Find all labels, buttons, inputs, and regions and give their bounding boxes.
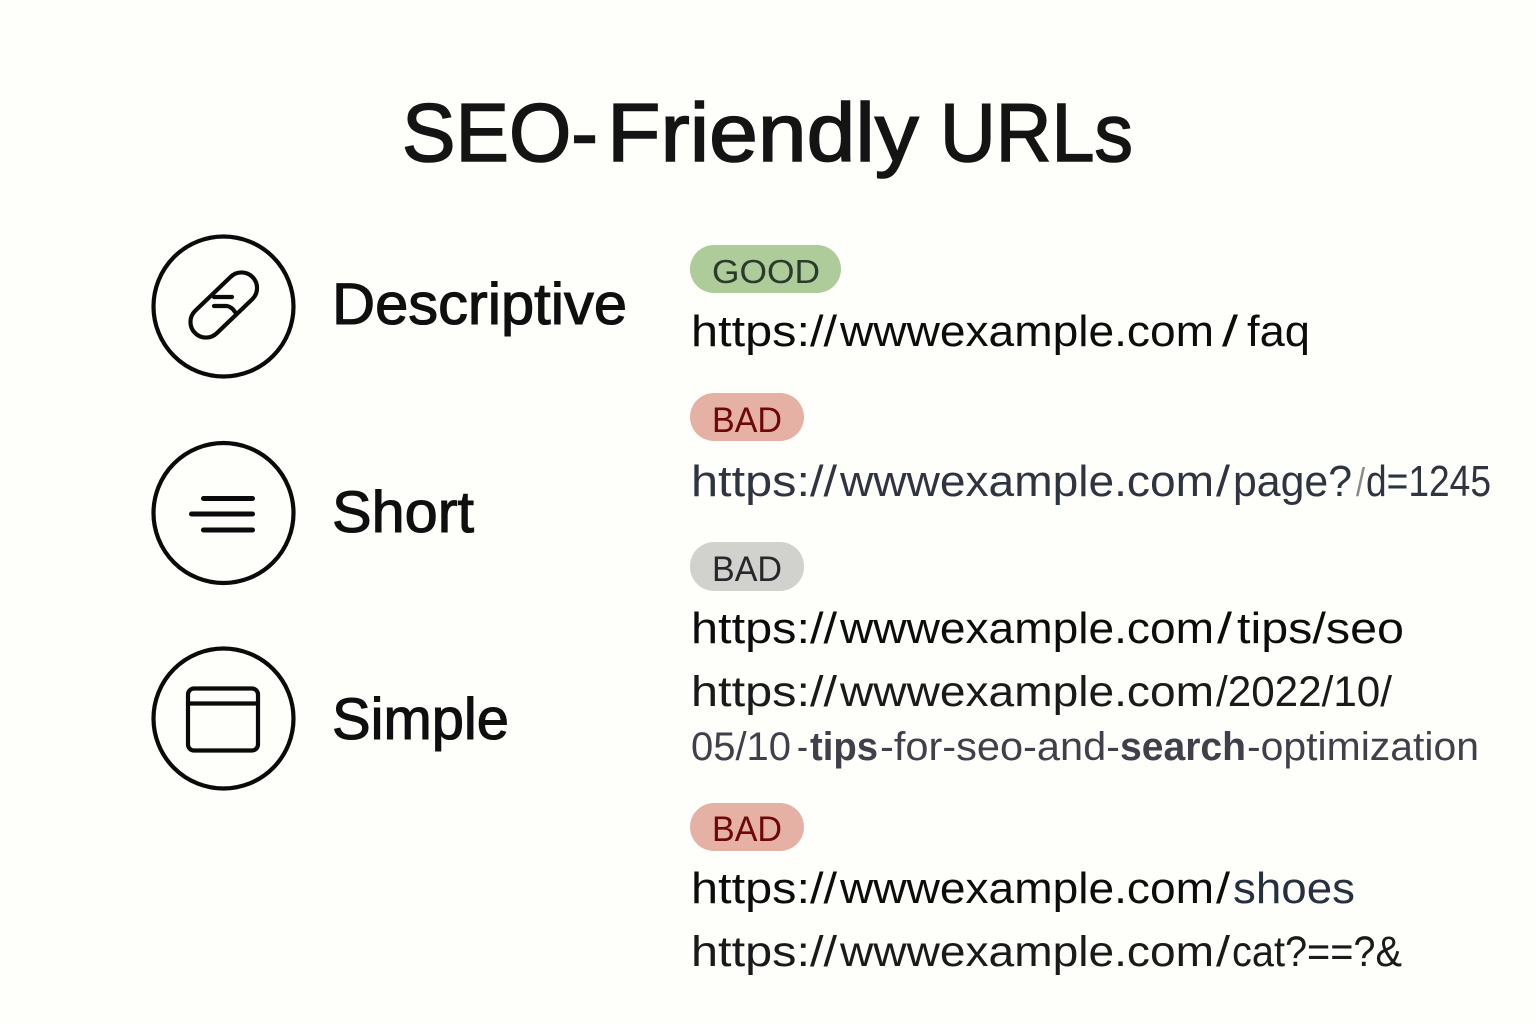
badge: bad red second: BAD [712,810,782,849]
url: long dated line two: -optimization [1247,725,1479,769]
icon: link pill [154,236,294,376]
badge: bad red [690,393,804,441]
icon: short lines [154,443,294,583]
url: tips seo: tips/seo [1237,604,1404,653]
label: short: Short [332,480,474,545]
label: descriptive: Descriptive [332,272,627,337]
url: long dated line one: /2022/10/ [1216,668,1392,716]
url: cat query: / [1216,928,1230,976]
title: URLs [940,86,1133,179]
label: simple: Simple [332,687,509,752]
url: long dated line two: -for-seo-and- [880,725,1120,769]
url: good faq: faq [1247,307,1310,356]
url: long dated line two: search [1120,725,1246,769]
badge: good [690,245,841,293]
url: tips seo: / [1217,604,1233,653]
url: shoes: / [1216,864,1231,913]
url: shoes: https:// [691,864,838,913]
title: SEO- [402,86,598,179]
url: bad query id: https:// [691,457,838,506]
url: tips seo: https:// [691,604,838,653]
url: good faq: / [1222,307,1239,356]
url: long dated line one: wwwexample.com [839,668,1214,716]
url: cat query: https:// [691,928,837,976]
url: good faq: wwwexample.com [839,307,1214,356]
badge: bad grey: BAD [712,550,782,589]
url: good faq: https:// [691,307,838,356]
url: cat query: cat?==?& [1232,928,1402,976]
url: bad query id: / [1356,461,1366,505]
url: long dated line two: 05/10 [691,725,791,769]
badge: good: GOOD [712,253,820,290]
url: bad query id: wwwexample.com [839,457,1214,506]
url: bad query id: d=1245 [1366,457,1491,506]
url: long dated line two: tips [810,725,878,769]
title: Friendly [607,86,943,179]
icon: browser window [154,648,294,788]
panel: url examples [690,245,1491,976]
url: shoes: wwwexample.com [839,864,1214,913]
url: long dated line one: https:// [691,668,837,716]
url: long dated line two: - [797,725,808,769]
url: bad query id: page? [1233,457,1352,506]
badge: bad red second [690,803,804,851]
url: bad query id: / [1216,457,1231,506]
badge: bad red: BAD [712,401,782,440]
url: cat query: wwwexample.com [839,928,1214,976]
url: shoes: shoes [1233,864,1355,913]
panel: principles [154,236,627,788]
url: tips seo: wwwexample.com [839,604,1214,653]
badge: bad grey [690,542,804,591]
